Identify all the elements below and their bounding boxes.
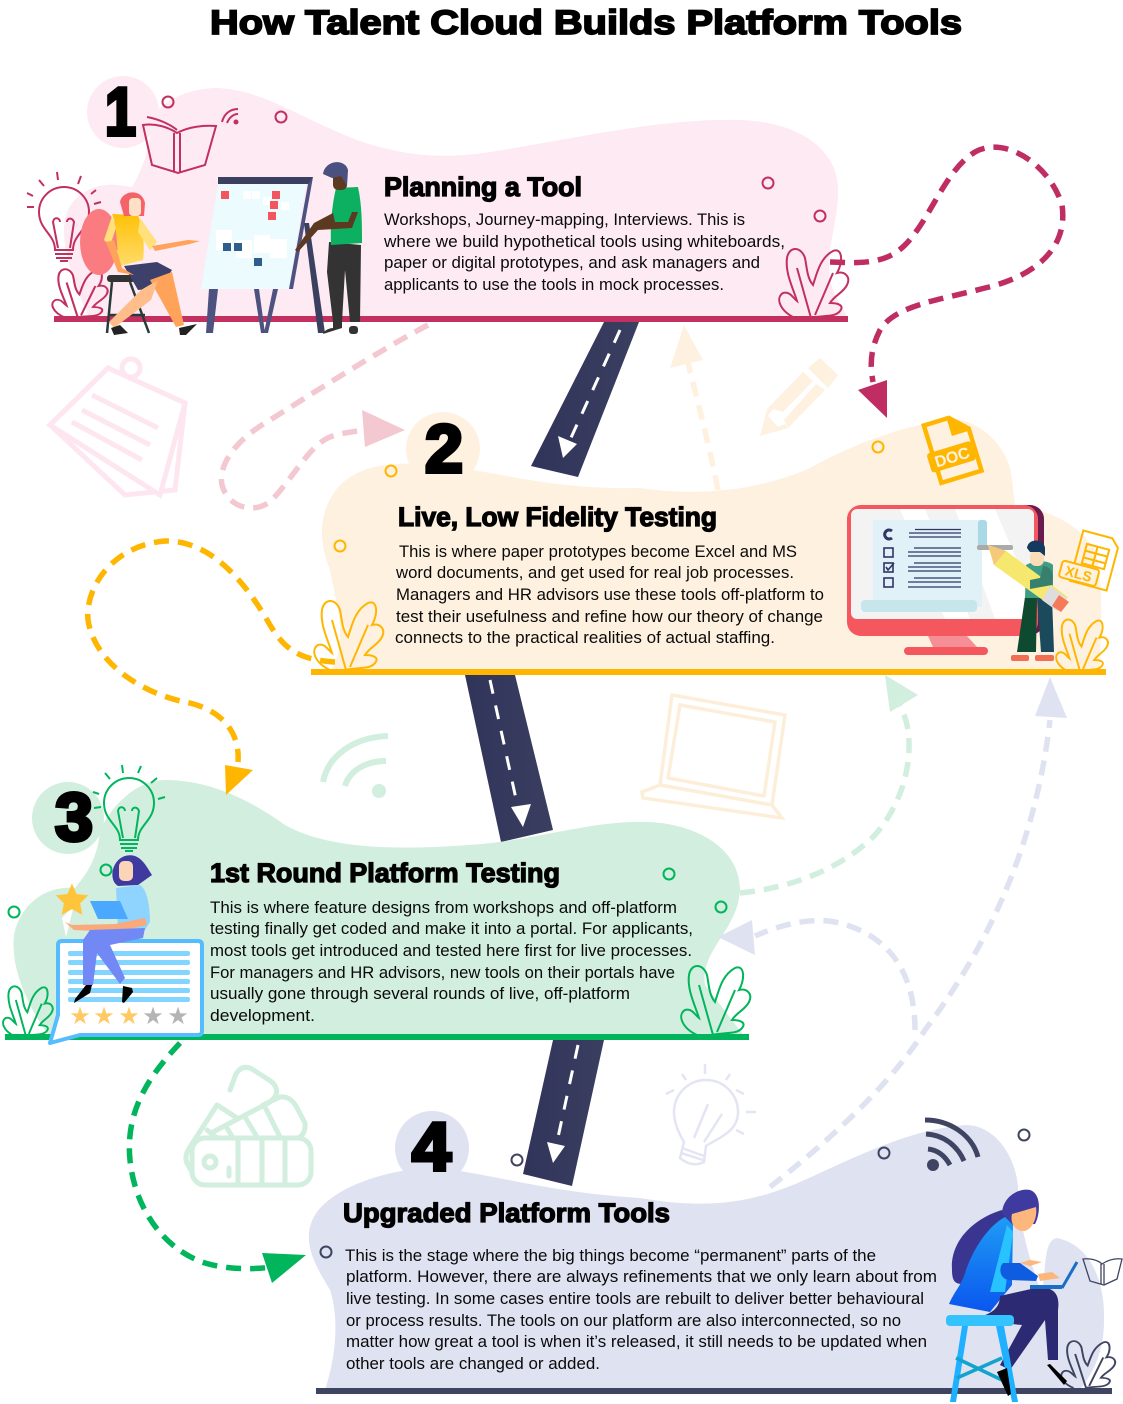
body text bbox=[345, 1246, 937, 1373]
body text: usually gone through several rounds of live, off-platform bbox=[210, 984, 630, 1003]
number 3: 3 bbox=[55, 779, 93, 855]
panel 2 blob bbox=[322, 412, 1101, 672]
baseline bars bbox=[5, 316, 1112, 1394]
icon: wifi bbox=[925, 1120, 978, 1171]
icon: lightbulb bbox=[27, 172, 101, 261]
body text: This is the stage where the big things become “permanent” parts of the bbox=[345, 1246, 876, 1265]
panel 1: planning a tool bbox=[27, 74, 848, 335]
icon: lightbulb bbox=[93, 765, 165, 851]
body text: live testing. In some cases entire tools are rebuilt to deliver better behavioural bbox=[346, 1289, 924, 1308]
icon: XLS file: XLS bbox=[1063, 562, 1094, 585]
icon: plant right bbox=[1056, 620, 1108, 671]
icon: plant bbox=[1061, 1341, 1115, 1388]
faint icon: sticky note bbox=[50, 359, 185, 495]
road 2 to 3 bbox=[465, 675, 553, 842]
faint icon: pencil bbox=[760, 358, 838, 436]
arrow: orange dashed from step 2 to step 3 bbox=[88, 541, 335, 795]
title: How Talent Cloud Builds Platform Tools bbox=[210, 4, 962, 42]
icon: plant left bbox=[52, 269, 108, 318]
small circles bbox=[162, 96, 826, 222]
body text: For managers and HR advisors, new tools on their portals have bbox=[210, 963, 675, 982]
icon: open book bbox=[143, 117, 216, 173]
body text: paper or digital prototypes, and ask managers and bbox=[384, 253, 760, 272]
road 3 to 4 bbox=[523, 1040, 604, 1186]
icon: plant left bbox=[3, 986, 53, 1036]
arrow: green dashed from step 3 to step 4 bbox=[129, 1043, 306, 1283]
small circles bbox=[320, 1130, 1030, 1258]
body text: or process results. The tools on our platform are also interconnected, so no bbox=[346, 1311, 901, 1330]
star rating: ★ bbox=[118, 1003, 140, 1030]
number 2: 2 bbox=[425, 411, 463, 487]
body text bbox=[395, 542, 824, 647]
body text: applicants to use the tools in mock processes. bbox=[384, 275, 724, 294]
body text bbox=[383, 210, 785, 294]
arrow: lavender dashed up to step 2 bbox=[770, 677, 1067, 1187]
body text: most tools get introduced and tested here first for live processes. bbox=[210, 941, 692, 960]
icon: DOC file: DOC bbox=[933, 445, 972, 471]
figure: man with pencil bbox=[988, 540, 1069, 661]
body text: This is where paper prototypes become Excel and MS bbox=[399, 542, 797, 561]
icon: plant left bbox=[314, 601, 383, 670]
figure: seated woman bbox=[80, 192, 200, 335]
arrow: mint dashed up to step 2 bbox=[740, 675, 918, 893]
body text: other tools are changed or added. bbox=[346, 1354, 600, 1373]
panel 2: live, low fidelity testing bbox=[314, 411, 1120, 671]
star rating bbox=[69, 1003, 189, 1030]
body text: development. bbox=[210, 1006, 315, 1025]
panel 3 blob bbox=[13, 780, 745, 1037]
figure: whiteboard bbox=[201, 177, 325, 333]
body text bbox=[210, 898, 693, 1025]
icon: wifi bbox=[222, 109, 238, 124]
heading: Live, Low Fidelity Testing bbox=[398, 502, 717, 532]
road 1 to 2 bbox=[531, 322, 639, 477]
body text: where we build hypothetical tools using whiteboards, bbox=[383, 232, 785, 251]
arrow: pale pink loop into step 2 bbox=[221, 325, 428, 508]
body text: connects to the practical realities of actual staffing. bbox=[395, 628, 775, 647]
heading: Upgraded Platform Tools bbox=[343, 1198, 670, 1228]
body text: word documents, and get used for real job processes. bbox=[395, 563, 794, 582]
panel 1 blob bbox=[64, 76, 848, 318]
star rating: ★ bbox=[69, 1003, 91, 1030]
faint icon: wifi bbox=[323, 736, 388, 798]
icon: open book bbox=[1083, 1259, 1122, 1285]
number 4: 4 bbox=[412, 1109, 451, 1185]
heading: Planning a Tool bbox=[384, 172, 582, 202]
star rating: ★ bbox=[142, 1003, 164, 1030]
body text: Workshops, Journey-mapping, Interviews. This is bbox=[384, 210, 745, 229]
figure: woman on stool with laptop bbox=[946, 1190, 1077, 1402]
star rating: ★ bbox=[167, 1003, 189, 1030]
figure: computer monitor bbox=[847, 505, 1044, 655]
icon: plant right bbox=[779, 249, 848, 318]
faint icon: laptop bbox=[642, 695, 785, 818]
icon: DOC file bbox=[918, 413, 982, 485]
figure: standing man bbox=[295, 162, 362, 334]
icon: XLS file bbox=[1058, 527, 1120, 591]
arrow: lavender dashed to step 3 bbox=[718, 920, 915, 1030]
body text: Managers and HR advisors use these tools off-platform to bbox=[396, 585, 824, 604]
review card bbox=[50, 941, 202, 1043]
number 1: 1 bbox=[105, 74, 136, 150]
panel 4: upgraded platform tools bbox=[320, 1109, 1122, 1402]
small circles bbox=[8, 864, 726, 918]
arrow: magenta dashed from step 1 to step 2 bbox=[830, 147, 1063, 418]
body text: test their usefulness and refine how our theory of change bbox=[396, 607, 823, 626]
figure: woman with laptop on card bbox=[58, 855, 152, 1003]
heading: 1st Round Platform Testing bbox=[210, 858, 560, 888]
panel 3: 1st round platform testing bbox=[3, 765, 750, 1043]
small circles bbox=[334, 442, 884, 552]
icon: plant right bbox=[681, 966, 750, 1035]
body text: This is where feature designs from workshops and off-platform bbox=[210, 898, 677, 917]
document scroll bbox=[861, 520, 1013, 612]
star rating: ★ bbox=[93, 1003, 115, 1030]
faint icon: colour palette bbox=[186, 1067, 311, 1185]
body text: platform. However, there are always refinements that we only learn about from bbox=[346, 1267, 937, 1286]
panel 4 blob bbox=[309, 1111, 1104, 1390]
body text: matter how great a tool is when it’s released, it still needs to be updated when bbox=[346, 1332, 927, 1351]
faint icon: lightbulb bbox=[666, 1064, 756, 1164]
arrow: pale cream up to step 1 bbox=[670, 325, 718, 490]
body text: testing finally get coded and make it into a portal. For applicants, bbox=[210, 919, 693, 938]
